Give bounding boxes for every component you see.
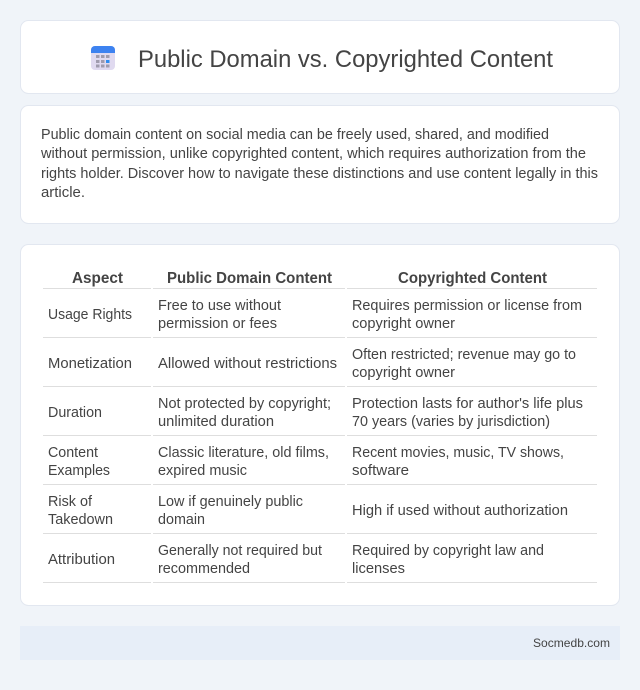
table header: Copyrighted Content	[398, 270, 547, 287]
row: duration	[48, 396, 583, 430]
panel: intro	[20, 106, 620, 224]
row: usage rights: Usage Rights	[48, 307, 132, 323]
row: attribution: licenses	[352, 561, 405, 577]
row: risk of takedown: domain	[158, 512, 205, 528]
row: duration: 70 years (varies by jurisdiction)	[352, 414, 550, 430]
footer credit: Socmedb.com	[533, 636, 610, 650]
row: attribution: recommended	[158, 561, 250, 577]
icon: calendar	[91, 46, 115, 70]
row: content examples: Recent movies, music, TV shows,	[352, 445, 564, 461]
row: attribution	[48, 543, 544, 577]
row: monetization: Often restricted; revenue may go to	[352, 347, 576, 363]
row: risk of takedown: High if used without authorization	[352, 503, 568, 519]
row: risk of takedown: Risk of	[48, 494, 93, 510]
row: risk of takedown: Low if genuinely public	[158, 494, 303, 510]
footer	[20, 626, 620, 660]
intro text: article.	[41, 185, 85, 201]
row: content examples	[48, 445, 564, 479]
table header: Public Domain Content	[167, 270, 332, 287]
row: content examples: software	[352, 463, 409, 479]
row: attribution: Generally not required but	[158, 543, 322, 559]
row: usage rights: permission or fees	[158, 316, 277, 332]
row: monetization: Monetization	[48, 356, 132, 372]
row: usage rights: copyright owner	[352, 316, 455, 332]
row: content examples: Classic literature, old films,	[158, 445, 329, 461]
row: attribution: Required by copyright law and	[352, 543, 544, 559]
row: monetization: copyright owner	[352, 365, 455, 381]
row: content examples: Examples	[48, 463, 110, 479]
row: risk of takedown: Takedown	[48, 512, 113, 528]
intro text: without permission, unlike copyrighted content, which requires authorization from the	[40, 146, 586, 162]
row: usage rights: Requires permission or license from	[352, 298, 582, 314]
table header: Aspect	[72, 270, 123, 287]
panel: title card	[20, 20, 620, 94]
intro text: Public domain content on social media can be freely used, shared, and modified	[41, 127, 549, 143]
intro text	[40, 127, 598, 201]
panel: comparison table	[20, 244, 620, 606]
title: Public Domain vs. Copyrighted Content	[138, 46, 553, 73]
row: monetization	[48, 347, 576, 381]
table header	[72, 270, 547, 287]
row: content examples: expired music	[158, 463, 247, 479]
row: duration: unlimited duration	[158, 414, 274, 430]
row: attribution: Attribution	[48, 552, 115, 568]
row: usage rights: Free to use without	[158, 298, 281, 314]
row: content examples: Content	[48, 445, 98, 461]
intro text: rights holder. Discover how to navigate these distinctions and use content legally in this	[41, 166, 598, 182]
row: risk of takedown	[48, 494, 568, 528]
row: monetization: Allowed without restrictions	[158, 356, 337, 372]
row: duration: Protection lasts for author's life plus	[352, 396, 583, 412]
row: duration: Not protected by copyright;	[158, 396, 331, 412]
row: duration: Duration	[48, 405, 102, 421]
row: usage rights	[48, 298, 582, 332]
